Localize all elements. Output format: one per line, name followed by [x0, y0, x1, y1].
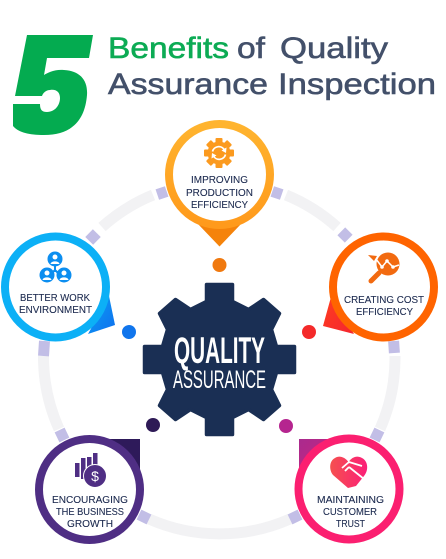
pointer — [299, 439, 331, 471]
label: EFFICIENCY — [356, 307, 413, 318]
label — [186, 175, 253, 211]
pointer — [108, 439, 140, 472]
title: Inspection — [278, 68, 436, 101]
label — [344, 295, 424, 318]
label: ENVIRONMENT — [19, 305, 92, 316]
title — [108, 32, 436, 101]
icon: magnifier with trend — [368, 252, 400, 281]
pointer — [88, 296, 115, 334]
icon: team — [40, 252, 72, 282]
dot: orange — [212, 258, 226, 272]
label — [317, 495, 384, 530]
panel: better work environment — [5, 236, 115, 338]
label — [19, 293, 92, 316]
label: PRODUCTION — [186, 188, 253, 199]
label: CUSTOMER — [323, 507, 377, 518]
label: IMPROVING — [191, 175, 248, 186]
gear label: QUALITY — [174, 330, 265, 371]
icon: heart handshake — [330, 457, 367, 488]
gear label — [173, 330, 266, 394]
label: CREATING COST — [344, 295, 424, 306]
label — [52, 495, 128, 530]
title: Assurance — [108, 68, 268, 101]
dot: red — [302, 325, 316, 339]
label: BETTER WORK — [20, 293, 90, 304]
pointer — [323, 297, 354, 334]
title: Benefits — [108, 32, 229, 65]
icon: bars and coin: $ — [91, 468, 99, 484]
icon: gear with arrows — [204, 138, 234, 168]
dot: magenta — [279, 419, 293, 433]
connecting ring — [43, 191, 395, 534]
central gear — [144, 284, 294, 434]
label: ENCOURAGING — [52, 495, 128, 506]
label: TRUST — [336, 519, 365, 530]
label: MAINTAINING — [317, 495, 384, 506]
label: THE BUSINESS — [56, 507, 124, 518]
dot: blue — [122, 325, 136, 339]
title: of — [237, 32, 266, 65]
label: GROWTH — [67, 519, 113, 530]
gear label: ASSURANCE — [173, 366, 266, 394]
dot: dark purple — [146, 418, 160, 432]
panel: creating cost efficiency — [323, 236, 434, 338]
panel: encouraging the business growth — [39, 439, 140, 540]
number 5 — [13, 35, 93, 135]
panel: improving production efficiency — [169, 124, 270, 246]
pointer — [198, 224, 241, 246]
title: Quality — [280, 32, 388, 65]
label: EFFICIENCY — [191, 200, 248, 211]
panel: maintaining customer trust — [298, 438, 400, 540]
